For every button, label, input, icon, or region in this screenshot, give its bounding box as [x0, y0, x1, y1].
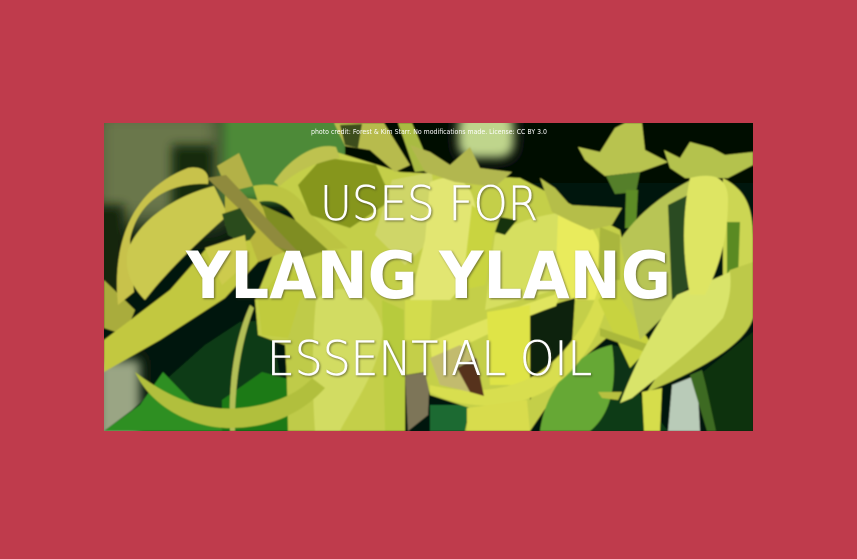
- photo: ylang ylang flowers: [104, 123, 753, 431]
- upper centre petals: [274, 123, 622, 230]
- centre petal mass: [255, 150, 640, 431]
- title: [185, 177, 671, 387]
- photo credit: photo credit: Forest & Kim Starr. No modifications made. License: CC BY 3.0: [311, 128, 547, 136]
- photo backdrop: [104, 123, 753, 431]
- dark gap between petals: [529, 297, 636, 400]
- title line: uses for: USES FOR: [320, 177, 538, 232]
- title line: essential oil: ESSENTIAL OIL: [267, 332, 592, 387]
- top-right buds: [578, 123, 753, 228]
- bottom leaves: [104, 320, 753, 431]
- right flower: [598, 176, 753, 431]
- green leaf: [540, 345, 614, 431]
- left flower: [104, 153, 348, 372]
- title line: ylang ylang: YLANG YLANG: [185, 239, 671, 314]
- lower centre petals: [135, 265, 652, 431]
